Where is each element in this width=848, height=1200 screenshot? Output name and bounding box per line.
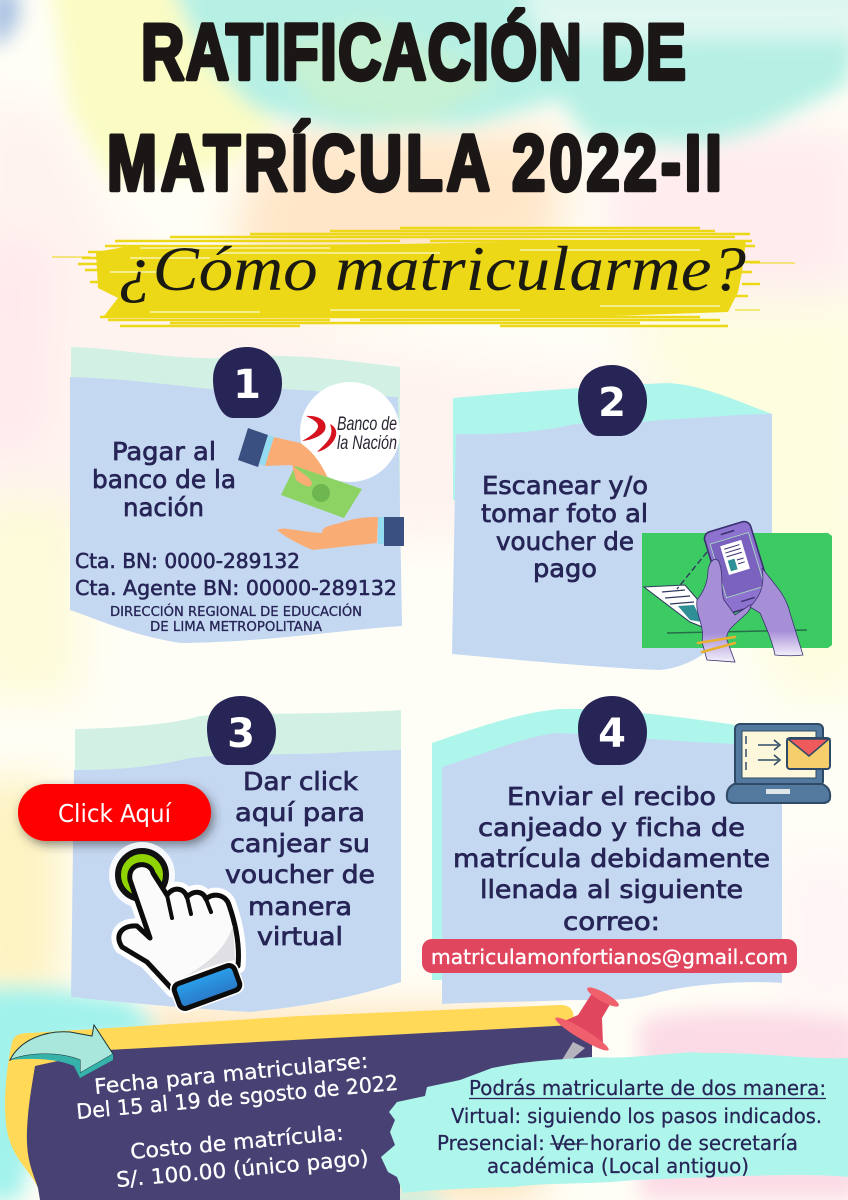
step 1 text [92,437,236,522]
account numbers [75,549,397,600]
step 4 text: matrícula debidamente [453,844,770,873]
badge 2 [578,365,647,436]
icon: push pin [553,984,621,1060]
text: fecha y costo [75,1049,399,1192]
step 2 text [481,471,648,583]
badge 1 [213,347,282,418]
panel: step 3 [18,696,401,1015]
step 3 text: virtual [257,922,343,951]
heading: Podrás matricularte de dos manera: [469,1076,826,1100]
text: fecha y costo: Del 15 al 19 de sgosto de 2022 [75,1071,399,1124]
text: fecha y costo: Fecha para matricularse: [93,1049,369,1099]
text: fecha y costo: Costo de matrícula: [129,1121,345,1164]
text: modalities: Virtual: siguiendo los pasos indicados. [451,1104,822,1128]
institution: DIRECCIÓN REGIONAL DE EDUCACIÓN [110,602,362,620]
panel: step 4 [422,696,830,1004]
subtitle: ¿Cómo matricularme? [118,234,746,304]
logo: Banco de la Nación [300,382,400,482]
email pill [422,939,797,973]
step 3 text [225,767,375,951]
badge 4 [578,696,647,765]
brush stroke banner [52,228,795,326]
text: modalities: académica (Local antiguo) [487,1154,749,1178]
illustration: hands exchanging money [238,428,404,550]
account numbers: Cta. Agente BN: 00000-289132 [75,576,397,600]
step 2 text: tomar foto al [481,499,648,528]
step 3 text: voucher de [225,860,375,889]
step 4 text: Enviar el recibo [507,782,716,811]
step 3 text: aquí para [235,798,365,827]
step 2 text: Escanear y/o [482,471,648,500]
panel: step 2 [452,365,832,670]
step 4 text: llenada al siguiente [480,875,743,904]
text: modalities [437,1104,822,1178]
step 3 text: canjear su [230,829,370,858]
badge 3: 3 [227,711,255,757]
brush panel: two ways to enrol [381,1052,848,1193]
step 2 text: pago [533,554,597,583]
step 4 text [453,782,770,936]
step 4 text: canjeado y ficha de [478,813,745,842]
panel: step 1 [70,347,404,643]
logo: Banco de la Nación: la Nación [337,433,397,454]
institution: DE LIMA METROPOLITANA [150,619,323,635]
icon: laptop sending mail [727,724,830,803]
illustration: phone scanning voucher [642,520,832,662]
title [107,7,722,207]
badge 1: 1 [233,362,261,408]
institution [110,602,362,635]
title: RATIFICACIÓN DE [141,7,686,96]
button: Click Aquí [18,784,211,841]
title: MATRÍCULA 2022-II [107,118,722,207]
email pill: matriculamonfortianos@gmail.com [431,945,788,969]
button: Click Aquí: Click Aquí [58,799,172,828]
account numbers: Cta. BN: 0000-289132 [75,549,300,573]
step 1 text: nación [123,493,204,522]
icon: pointing hand [109,842,247,1015]
step 2 text: voucher de [496,527,634,556]
badge 4: 4 [598,711,626,757]
icon: curved arrow [10,1025,113,1078]
step 1 text: Pagar al [112,437,216,466]
text: modalities: Presencial: Ver horario de secretaría [437,1131,798,1155]
step 3 text: manera [248,892,352,921]
bottom note: dates and cost [5,1005,592,1200]
text: fecha y costo: S/. 100.00 (único pago) [115,1146,369,1192]
badge 2: 2 [598,380,626,426]
logo: Banco de la Nación: Banco de [337,414,397,435]
step 3 text: Dar click [243,767,359,796]
step 1 text: banco de la [92,465,236,494]
badge 3 [207,696,276,765]
step 4 text: correo: [563,907,660,936]
